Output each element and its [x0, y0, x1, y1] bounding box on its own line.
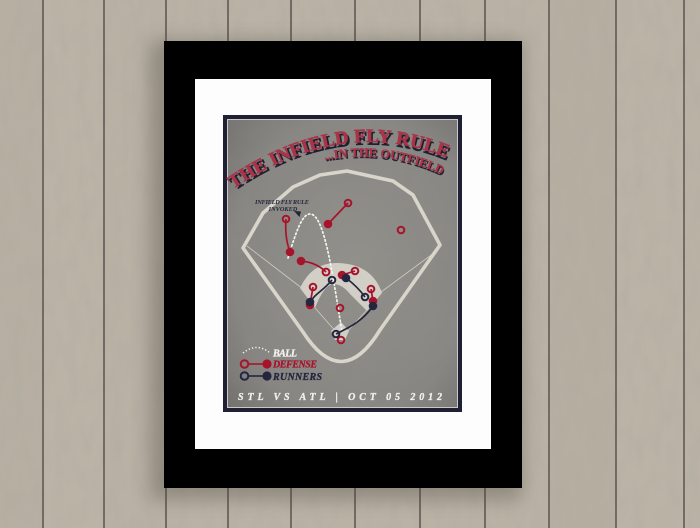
icon: annotation arrow [294, 211, 301, 217]
legend: runners: RUNNERS [272, 372, 322, 383]
legend: ball: BALL [272, 348, 297, 360]
legend [241, 348, 322, 383]
annotation: infield fly rule invoked: INFIELD FLY RULE [254, 199, 309, 206]
baseball field [243, 171, 440, 362]
thin baselines [247, 246, 438, 334]
filled circles: defense end [286, 220, 377, 309]
open circles: runners start [329, 277, 368, 337]
white mat [195, 79, 491, 449]
home plate dirt [331, 322, 349, 340]
filled circles: runners end [306, 274, 377, 310]
title: THE INFIELD FLY RULE [228, 132, 450, 189]
frame shadow [150, 40, 522, 500]
annotation: infield fly rule invoked: INVOKED [268, 206, 298, 213]
open circles: defense start [283, 200, 404, 343]
title: THE INFIELD FLY RULE [226, 129, 450, 188]
annotation: infield fly rule invoked [254, 199, 309, 213]
subtitle: ...IN THE OUTFIELD [326, 150, 444, 176]
black picture frame [164, 41, 522, 488]
subtitle: ...IN THE OUTFIELD [325, 148, 444, 174]
legend: defense: DEFENSE [272, 360, 317, 370]
ball flight path [288, 214, 342, 332]
infield dirt arc [300, 263, 382, 311]
defense paths [283, 200, 404, 343]
runner paths [306, 274, 377, 337]
footer: game and date: STL VS ATL | OCT 05 2012 [238, 392, 442, 403]
outfield wall and foul lines [243, 171, 440, 362]
poster [223, 115, 462, 412]
